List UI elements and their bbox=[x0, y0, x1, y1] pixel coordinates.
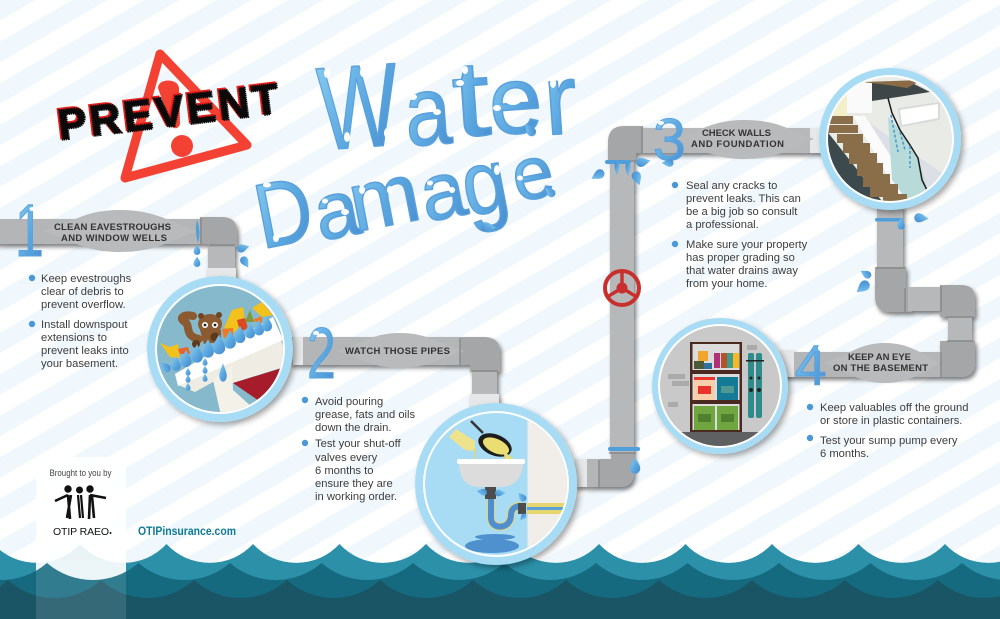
circle: storage shelf bbox=[652, 318, 788, 454]
brought to you by: Brought to you by bbox=[50, 468, 112, 478]
text block: step 1: Install downspout bbox=[41, 319, 128, 331]
text block: step 2 bbox=[302, 396, 416, 503]
frying pan bbox=[471, 421, 483, 433]
text block: step 3: prevent leaks. This can bbox=[686, 193, 801, 205]
text block: step 1: prevent overflow. bbox=[41, 299, 126, 311]
heading: Water Damage: a bbox=[412, 143, 473, 239]
text block: step 3: has proper grading so bbox=[686, 252, 795, 264]
warning triangle bbox=[125, 54, 247, 178]
number 1: 1 bbox=[15, 189, 44, 272]
number 2: 2 bbox=[307, 314, 336, 394]
label: clean eavestroughs: AND WINDOW WELLS bbox=[61, 233, 167, 244]
heading: Water Damage: D bbox=[246, 158, 321, 269]
text block: step 2: down the drain. bbox=[315, 422, 392, 434]
heading: Water Damage: r bbox=[540, 43, 581, 157]
water leaks bbox=[194, 121, 929, 474]
pipe: right loop bbox=[780, 205, 975, 377]
label: clean eavestroughs: CLEAN EAVESTROUGHS bbox=[54, 222, 171, 233]
text block: step 3 bbox=[672, 180, 808, 290]
label: check walls: CHECK WALLS bbox=[702, 128, 771, 139]
wall pipe bbox=[527, 503, 565, 514]
text block: step 3: Seal any cracks to bbox=[686, 180, 777, 192]
leaves bbox=[160, 343, 180, 358]
text block: step 1 bbox=[29, 273, 132, 370]
text block: step 2: Test your shut-off bbox=[315, 438, 401, 450]
pipe joints bbox=[201, 127, 973, 487]
text block: step 3: Make sure your property bbox=[686, 239, 808, 251]
text block: step 1: Keep evestroughs bbox=[41, 273, 132, 285]
number 4: 4 bbox=[795, 334, 827, 398]
text block: step 4: 6 months. bbox=[820, 448, 869, 460]
text block: step 4: Keep valuables off the ground bbox=[820, 402, 968, 414]
waves bbox=[0, 457, 1000, 619]
circle: sink bbox=[415, 400, 578, 570]
text block: step 4: Test your sump pump every bbox=[820, 435, 958, 447]
text block: step 3: be a big job so consult bbox=[686, 206, 798, 218]
pipe: section 2 bbox=[290, 337, 500, 408]
text block: step 1: prevent leaks into bbox=[41, 345, 129, 357]
pipe: long vertical bbox=[575, 126, 824, 487]
pipe: section 1 bbox=[0, 217, 237, 280]
text block: step 3: a professional. bbox=[686, 219, 759, 231]
heading: Water Damage: e bbox=[504, 128, 560, 218]
heading: Water Damage: a bbox=[401, 56, 455, 167]
text block: step 2: grease, fats and oils bbox=[315, 409, 416, 421]
title highlights bbox=[263, 66, 556, 242]
logo wordmark: OTIP RAEO bbox=[53, 526, 109, 538]
number 3: 3 bbox=[653, 107, 686, 173]
puddle bbox=[465, 539, 519, 553]
sink bowl bbox=[459, 464, 523, 487]
heading: Prevent: PREVENT bbox=[55, 75, 282, 150]
label: keep an eye: ON THE BASEMENT bbox=[833, 363, 928, 374]
label: keep an eye: KEEP AN EYE bbox=[848, 352, 911, 363]
heading: Prevent: PREVENT bbox=[54, 74, 280, 149]
text block: step 2: in working order. bbox=[315, 491, 397, 503]
heading: Water Damage: a bbox=[306, 162, 367, 258]
icon: OTIP three figures bbox=[55, 486, 106, 519]
heading: Water Damage: g bbox=[453, 129, 516, 237]
heading: Water Damage: e bbox=[485, 45, 546, 156]
water in gutter bbox=[157, 316, 272, 374]
heading: Water Damage: W bbox=[314, 38, 403, 175]
squirrel bbox=[182, 312, 222, 348]
logo panel: OTIP bbox=[50, 468, 112, 538]
label: clean eavestroughs bbox=[42, 210, 198, 252]
text block: step 2: 6 months to bbox=[315, 465, 373, 477]
circle: gutter with squirrel bbox=[147, 276, 293, 422]
heading: Water Damage: m bbox=[340, 144, 427, 250]
label: watch those pipes bbox=[336, 333, 464, 368]
text block: step 4 bbox=[807, 402, 968, 460]
label: watch those pipes: WATCH THOSE PIPES bbox=[345, 346, 450, 357]
label: check walls bbox=[676, 120, 814, 159]
text block: step 3: from your home. bbox=[686, 278, 767, 290]
text block: step 2: valves every bbox=[315, 452, 378, 464]
text block: step 1: your basement. bbox=[41, 358, 118, 370]
text block: step 4: or store in plastic containers. bbox=[820, 415, 962, 427]
heading: Water Damage: t bbox=[448, 37, 494, 160]
heading: Water Damage bbox=[246, 37, 581, 269]
label: keep an eye bbox=[824, 343, 940, 383]
circle: basement stairs bbox=[819, 68, 961, 210]
text block: step 1: extensions to bbox=[41, 332, 107, 344]
website link: OTIPinsurance.com bbox=[138, 524, 236, 538]
text block: step 2: ensure they are bbox=[315, 478, 393, 490]
text block: step 2: Avoid pouring bbox=[315, 396, 383, 408]
valve wheel bbox=[605, 271, 639, 305]
bottle bbox=[449, 429, 475, 451]
text block: step 1: clear of debris to bbox=[41, 286, 124, 298]
soffit bbox=[179, 341, 283, 392]
label: check walls: AND FOUNDATION bbox=[691, 139, 784, 150]
text block: step 3: that water drains away bbox=[686, 265, 798, 277]
